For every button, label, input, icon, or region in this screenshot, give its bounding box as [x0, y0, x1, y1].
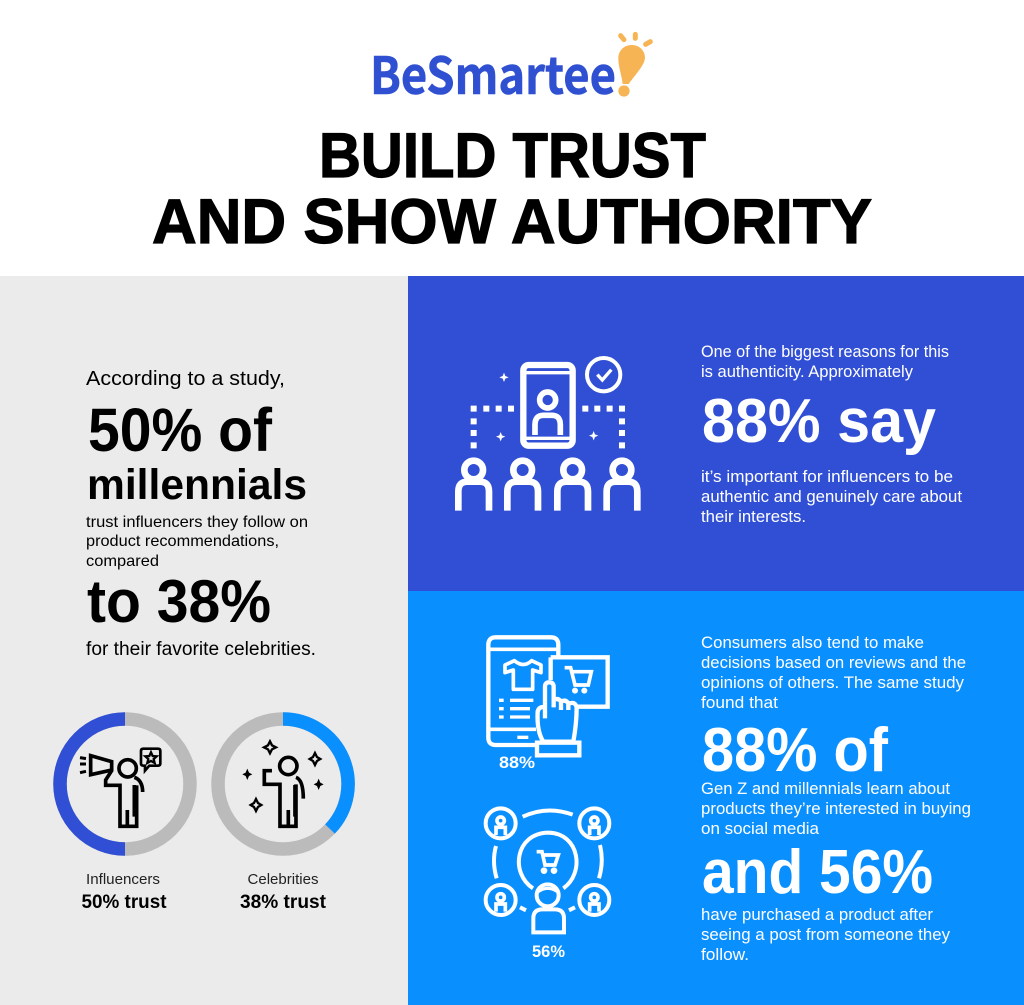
study text block: millennials: [87, 461, 307, 509]
title: AND SHOW AUTHORITY: [152, 187, 872, 257]
logo: BeSmartee: BeSmartee: [370, 35, 616, 109]
authenticity text block: 88% say: [702, 387, 936, 456]
panel: millennials study: [0, 276, 408, 1005]
study text block: According to a study,: [86, 368, 285, 390]
donut chart: celebrities 38% trust: [218, 719, 348, 913]
donut chart: celebrities 38% trust: Celebrities: [248, 871, 318, 888]
reviews text block: follow.: [701, 946, 749, 964]
icon: shopping phone with hand: [488, 637, 608, 755]
reviews text block: Consumers also tend to make: [701, 634, 924, 652]
reviews text block: 88% of: [702, 716, 888, 785]
donut chart: influencers 50% trust: 50% trust: [82, 892, 167, 913]
reviews text block: seeing a post from someone they: [701, 926, 951, 944]
title: [152, 121, 872, 257]
label: 88%: 88%: [499, 754, 535, 772]
reviews text block: decisions based on reviews and the: [701, 654, 966, 672]
authenticity text block: One of the biggest reasons for this: [701, 343, 949, 361]
donut chart: influencers 50% trust: [60, 719, 190, 913]
study text block: 50% of: [88, 396, 273, 464]
study text block: trust influencers they follow on: [86, 514, 308, 531]
study text block: for their favorite celebrities.: [86, 639, 316, 660]
authenticity text block: is authenticity. Approximately: [701, 363, 914, 381]
reviews text block: Gen Z and millennials learn about: [701, 780, 950, 798]
icon: celebrity with sparkles: [242, 741, 324, 826]
icon: influencer with megaphone: [80, 749, 160, 826]
study text block: to 38%: [87, 568, 271, 635]
reviews text block: on social media: [701, 820, 820, 838]
icon: phone broadcasting to audience: [458, 358, 637, 511]
authenticity text block: [701, 343, 962, 526]
donut chart: celebrities 38% trust: 38% trust: [240, 892, 327, 913]
donut chart: influencers 50% trust: Influencers: [86, 871, 160, 888]
study text block: [86, 368, 316, 660]
reviews text block: [701, 634, 971, 964]
study text block: compared: [86, 553, 159, 570]
reviews text block: and 56%: [702, 838, 933, 907]
icon: network of people around a cart: [486, 808, 609, 932]
title: BUILD TRUST: [319, 121, 706, 191]
reviews text block: found that: [701, 694, 778, 712]
panel: authenticity: [408, 276, 1024, 591]
reviews text block: products they’re interested in buying: [701, 800, 971, 818]
panel: reviews and social media: [408, 591, 1024, 1005]
authenticity text block: their interests.: [701, 508, 806, 526]
label: 56%: 56%: [532, 943, 565, 961]
authenticity text block: authentic and genuinely care about: [701, 488, 962, 506]
study text block: product recommendations,: [86, 533, 279, 550]
reviews text block: have purchased a product after: [701, 906, 934, 924]
reviews text block: opinions of others. The same study: [701, 674, 965, 692]
authenticity text block: it’s important for influencers to be: [701, 468, 953, 486]
